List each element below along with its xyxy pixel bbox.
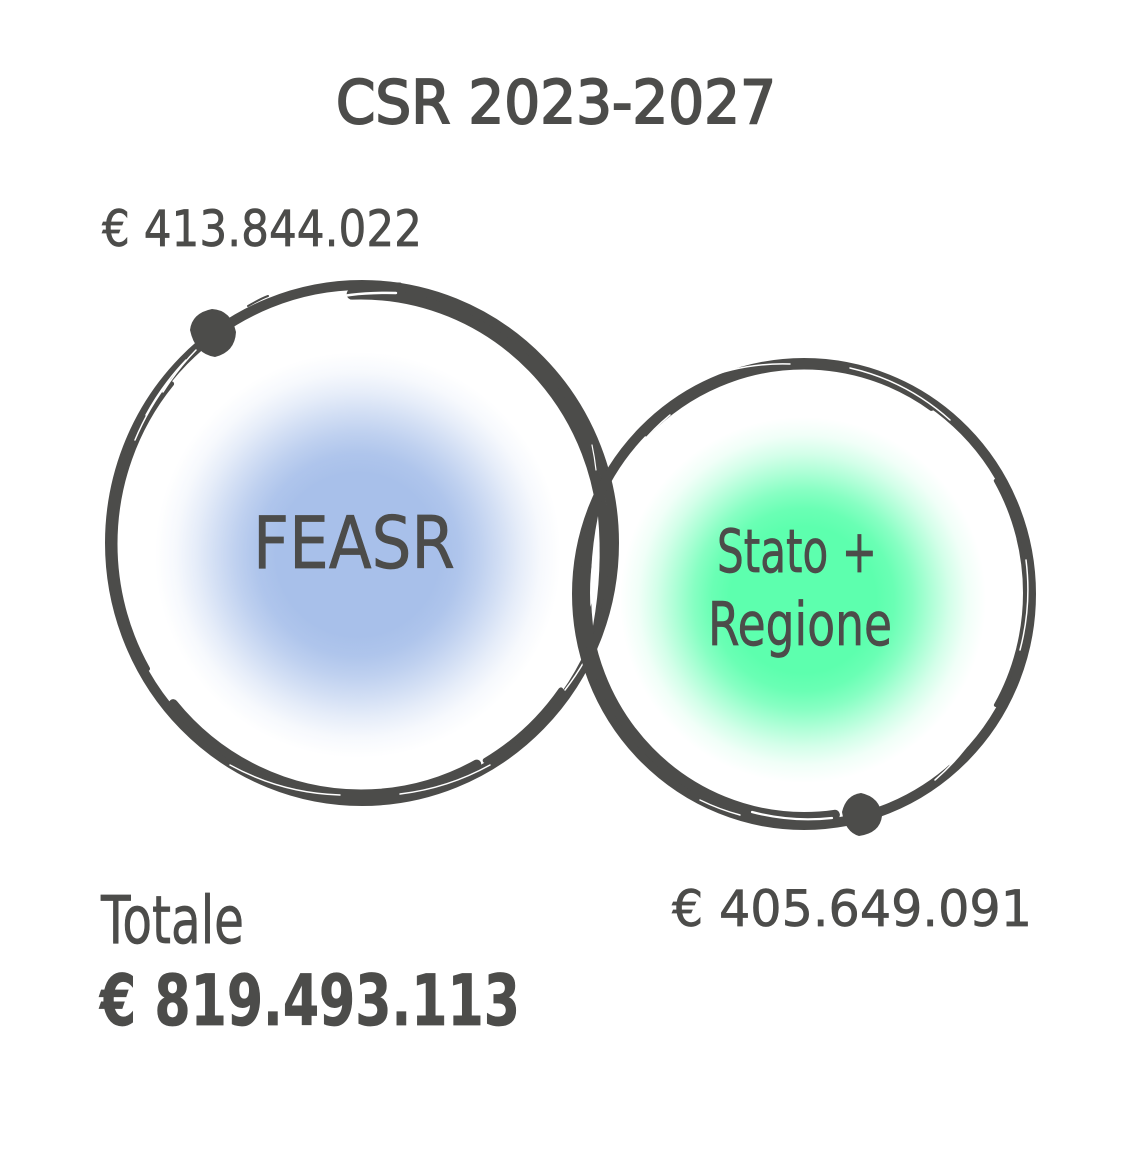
total: Totale	[100, 882, 244, 959]
Stato + Regione amount: € 405.649.091	[672, 880, 1032, 938]
FEASR amount: € 413.844.022	[102, 200, 422, 258]
total: € 819.493.113	[99, 960, 520, 1042]
ring: Stato + Regione	[577, 363, 1031, 825]
label: FEASR: FEASR	[253, 501, 455, 585]
gradient: FEASR blue glow	[155, 352, 561, 758]
ring: FEASR	[110, 284, 614, 801]
eye highlight: gap where the rings cross	[591, 516, 600, 626]
label: Stato + Regione: Regione	[708, 590, 892, 660]
total	[99, 882, 520, 1042]
label: Stato + Regione	[708, 517, 892, 660]
title: CSR 2023-2027	[336, 68, 776, 138]
gradient: Stato + Regione green glow	[620, 417, 986, 783]
dot: FEASR ring marker	[190, 309, 236, 357]
dot: Stato + Regione ring marker	[842, 793, 882, 836]
label: Stato + Regione: Stato +	[717, 517, 877, 587]
